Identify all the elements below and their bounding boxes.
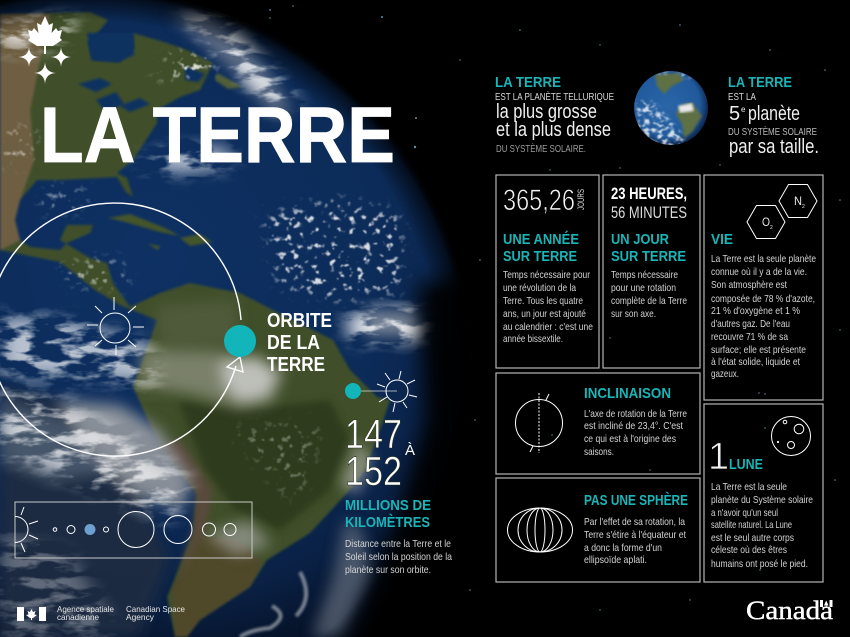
panel: inclinaison: L'axe de rotation de la Terre bbox=[584, 408, 687, 420]
header right: 5e planete: EST LA bbox=[728, 91, 756, 103]
panel: pas une sphere: Par l'effet de sa rotation, la bbox=[584, 516, 685, 528]
canadian space agency signature: canadienne bbox=[57, 612, 99, 622]
panel: vie: gazeux. bbox=[711, 368, 739, 380]
panel: inclinaison: INCLINAISON bbox=[584, 385, 671, 402]
header right: 5e planete bbox=[728, 74, 819, 158]
logo: maple leaf and stars bbox=[18, 16, 71, 84]
stars bbox=[269, 5, 841, 611]
panel: pas une sphere: PAS UNE SPHÈRE bbox=[584, 492, 688, 509]
orbit label: TERRE bbox=[267, 354, 325, 376]
orbit label: DE LA bbox=[267, 332, 320, 354]
panel: une annee bbox=[496, 175, 599, 368]
orbit diagram bbox=[0, 203, 243, 456]
canadian space agency signature bbox=[17, 604, 185, 622]
orbit label bbox=[267, 310, 332, 376]
header left: la terre telluric: LA TERRE bbox=[495, 74, 561, 91]
panel: un jour: UN JOUR bbox=[611, 231, 669, 248]
earth globe bbox=[0, 0, 490, 637]
panel: pas une sphere: a donc la forme d'un bbox=[584, 542, 662, 554]
header right: 5e planete: par sa taille. bbox=[729, 136, 819, 158]
canadian space agency signature: Agency bbox=[126, 612, 155, 622]
amazon and andes shading bbox=[160, 400, 350, 580]
panel: lune: satellite naturel. La Lune bbox=[711, 519, 792, 531]
panel: une annee: 365,26 bbox=[503, 184, 575, 217]
panel: une annee: Temps nécessaire pour bbox=[503, 269, 590, 281]
panel: un jour: 23 HEURES, bbox=[611, 184, 687, 203]
panel: pas une sphere bbox=[496, 478, 700, 582]
panel: inclinaison: est incliné de 23,4°. C'est bbox=[584, 420, 683, 432]
panel: pas une sphere: Terre s'étire à l'équateur et bbox=[584, 529, 686, 541]
panel: lune: céleste où des êtres bbox=[711, 544, 787, 556]
panel: vie: Son atmosphère est bbox=[711, 279, 787, 291]
distance figures: À bbox=[405, 442, 415, 459]
panel: vie: d'autres gaz. De l'eau bbox=[711, 318, 790, 330]
panel: pas une sphere: ellipsoïde aplati. bbox=[584, 554, 647, 566]
canadian space agency signature: Agence spatiale bbox=[57, 604, 114, 614]
distance text: Soleil selon la position de la bbox=[345, 551, 452, 563]
panel: lune: a n'avoir qu'un seul bbox=[711, 507, 778, 519]
panel: vie: surface; elle est présente bbox=[711, 344, 806, 356]
distance heading: MILLIONS DE bbox=[345, 497, 431, 514]
header right: 5e planete: 5 bbox=[729, 103, 740, 125]
header left: la terre telluric bbox=[495, 74, 614, 155]
orbit arrow head bbox=[227, 357, 243, 372]
panel: un jour: 56 MINUTES bbox=[611, 203, 687, 222]
panel: une annee: UNE ANNÉE bbox=[503, 231, 579, 248]
southern swirl bbox=[240, 572, 306, 637]
panel: vie: à l'état solide, liquide et bbox=[711, 356, 800, 368]
distance figures: 147 bbox=[345, 411, 402, 457]
small earth globe bbox=[634, 71, 708, 146]
panel: vie bbox=[704, 175, 823, 400]
header left: la terre telluric: la plus grosse bbox=[496, 101, 597, 123]
panel: un jour bbox=[603, 175, 700, 368]
distance figures bbox=[345, 411, 415, 494]
soft cloud masses bbox=[0, 14, 420, 637]
panel: une annee: JOURS bbox=[576, 189, 586, 210]
canadian space agency signature: Canadian Space bbox=[126, 604, 185, 614]
header left: la terre telluric: DU SYSTÈME SOLAIRE. bbox=[496, 142, 586, 155]
distance text: planète sur son orbite. bbox=[345, 564, 431, 576]
icon: gas hexagons: 2 bbox=[802, 204, 805, 210]
streak clouds bbox=[0, 12, 428, 637]
earth marker on orbit bbox=[224, 325, 256, 357]
panel: un jour: SUR TERRE bbox=[611, 248, 686, 265]
lakes bbox=[78, 33, 205, 112]
panel: un jour: sur son axe. bbox=[611, 308, 656, 320]
panel: une annee: SUR TERRE bbox=[503, 248, 577, 265]
panel: lune: planète du Système solaire bbox=[711, 494, 813, 506]
land masses bbox=[0, 12, 390, 637]
panel: vie: VIE bbox=[711, 231, 733, 248]
panel: vie: recouvre 71 % de sa bbox=[711, 331, 788, 343]
icon: gas hexagons: O bbox=[762, 215, 770, 229]
distance diagram: earth and sun bbox=[345, 371, 417, 412]
panel: vie: La Terre est la seule planète bbox=[711, 253, 816, 265]
distance heading: KILOMÈTRES bbox=[345, 514, 430, 531]
icon: flattened ellipsoid bbox=[508, 508, 572, 552]
distance text bbox=[345, 538, 452, 576]
header right: 5e planete: e bbox=[741, 105, 746, 114]
solar system strip bbox=[15, 502, 252, 558]
title: LA TERRE bbox=[40, 90, 395, 179]
header left: la terre telluric: et la plus dense bbox=[496, 119, 611, 141]
header right: 5e planete: LA TERRE bbox=[728, 74, 792, 91]
distance figures: 152 bbox=[345, 448, 402, 494]
night side shading bbox=[352, 270, 472, 628]
orbit label: ORBITE bbox=[267, 310, 332, 332]
panel: lune: est le seul autre corps bbox=[711, 532, 794, 544]
puff clouds bbox=[5, 55, 400, 500]
panel: un jour: complète de la Terre bbox=[611, 295, 687, 307]
panel: un jour: pour une rotation bbox=[611, 282, 676, 294]
panel: une annee: une révolution de la bbox=[503, 282, 576, 294]
header right: 5e planete: planète bbox=[748, 103, 800, 125]
icon: gas hexagons bbox=[747, 184, 817, 238]
panel: vie: connue où il y a de la vie. bbox=[711, 266, 807, 278]
panel: vie: 21 % d'oxygène et 1 % bbox=[711, 305, 800, 317]
header left: la terre telluric: EST LA PLANÈTE TELLURIQUE bbox=[495, 90, 614, 103]
panel: une annee: au calendrier : c'est une bbox=[503, 321, 593, 333]
panel: une annee: Terre. Tous les quatre bbox=[503, 295, 583, 307]
panel: vie: composée de 78 % d'azote, bbox=[711, 293, 815, 305]
canada wordmark: Canada bbox=[746, 596, 834, 625]
icon: tilted axis globe bbox=[516, 393, 562, 453]
panel: lune: 1 bbox=[708, 436, 729, 478]
panel: inclinaison: saisons. bbox=[584, 446, 614, 458]
panel: inclinaison: ce qui est à l'origine des bbox=[584, 433, 676, 445]
distance text: Distance entre la Terre et le bbox=[345, 538, 451, 550]
panel: une annee: année bissextile. bbox=[503, 333, 563, 345]
panel: lune bbox=[704, 404, 823, 582]
panel: inclinaison bbox=[496, 373, 700, 474]
panel: lune: humains ont posé le pied. bbox=[711, 558, 808, 570]
panel: une annee: ans, un jour est ajouté bbox=[503, 308, 586, 320]
mini earth bbox=[84, 524, 96, 535]
panel: lune: La Terre est la seule bbox=[711, 481, 787, 493]
icon: gas hexagons: N bbox=[794, 194, 802, 208]
icon: gas hexagons: 2 bbox=[770, 225, 773, 231]
header right: 5e planete: DU SYSTÈME SOLAIRE bbox=[728, 125, 817, 138]
icon: moon bbox=[772, 416, 810, 456]
orbit centre sun bbox=[87, 297, 144, 355]
panel: lune: LUNE bbox=[729, 456, 763, 473]
limb shading bbox=[0, 0, 480, 637]
distance heading bbox=[345, 497, 431, 531]
panel: un jour: Temps nécessaire bbox=[611, 269, 678, 281]
